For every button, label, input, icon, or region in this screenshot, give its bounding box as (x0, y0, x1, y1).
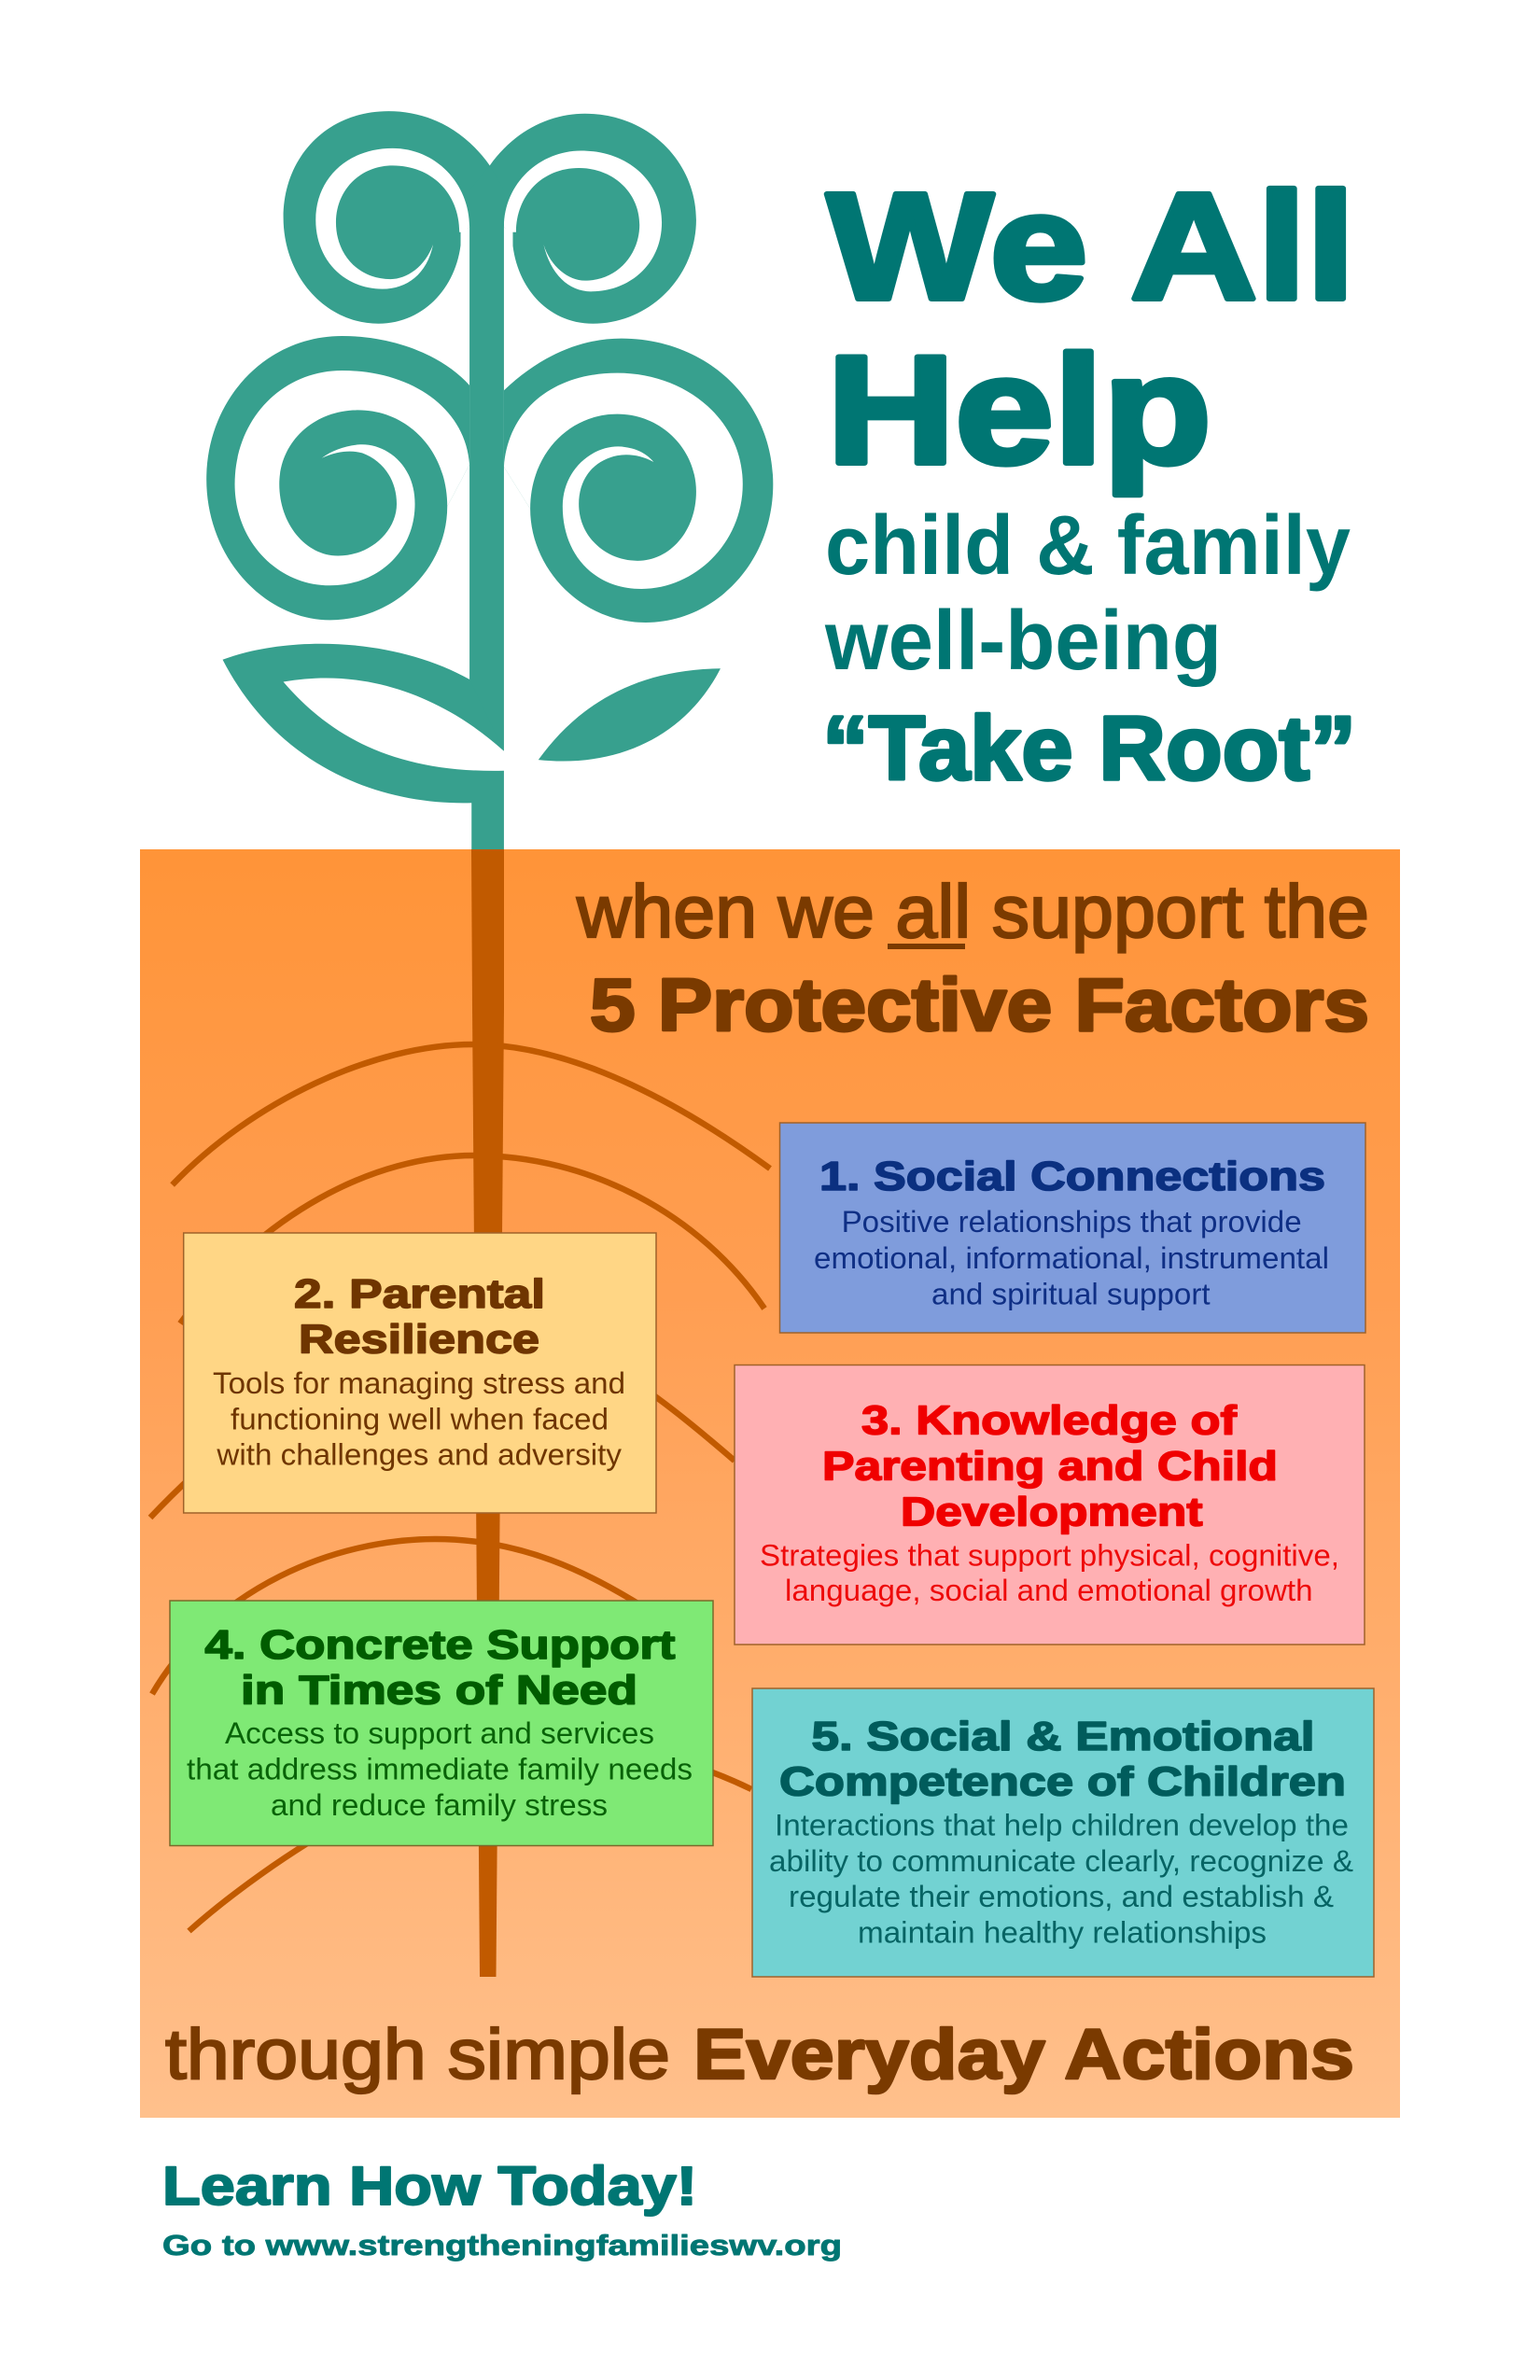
heading: Social and Emotional Competence of Children (779, 1714, 1346, 1805)
text: Knowledge description (760, 1538, 1339, 1607)
heading: through simple Everyday Actions: through simple (165, 2015, 670, 2094)
panel: 4. Concrete Support in Times of Need (170, 1601, 713, 1846)
icon: top right spiral (490, 114, 696, 332)
heading: Social and Emotional Competence of Children: 5. Social & Emotional (812, 1714, 1314, 1759)
panel: orange root background (140, 849, 1400, 2118)
text: Knowledge description: Strategies that support physical, cognitive, (760, 1538, 1339, 1572)
text: Parental Resilience description: with challenges and adversity (216, 1438, 622, 1472)
icon: root branches (150, 1044, 770, 1931)
text: Social Connections description (814, 1205, 1329, 1311)
text: Concrete Support description (187, 1716, 693, 1822)
heading: Concrete Support in Times of Need (205, 1622, 676, 1714)
heading: Knowledge of Parenting and Child Development (822, 1398, 1278, 1535)
heading: Parental Resilience: Resilience (299, 1316, 539, 1363)
icon: stem (469, 165, 504, 751)
text: Concrete Support description: that address immediate family needs (187, 1753, 693, 1786)
heading: 5 Protective Factors: 5 Protective Factors (590, 963, 1369, 1046)
text: Parental Resilience description (213, 1366, 625, 1472)
chart: root system (150, 849, 770, 1977)
heading: Knowledge of Parenting and Child Development: Development (901, 1490, 1203, 1535)
panel: 3. Knowledge of Parenting and Child Development (735, 1365, 1365, 1645)
heading: Parental Resilience: 2. Parental (294, 1271, 545, 1317)
icon: tree logo with spirals and leaves (206, 111, 773, 849)
panel: 1. Social Connections (780, 1123, 1365, 1333)
subheading: child and family: child & family (825, 499, 1351, 593)
icon: right leaf (539, 668, 721, 762)
text: Social Connections description: emotional, informational, instrumental (814, 1241, 1329, 1275)
heading: Parental Resilience (294, 1271, 545, 1363)
heading: Help: Help (827, 324, 1211, 496)
heading: Learn How Today: Learn How Today! (162, 2156, 697, 2217)
text: Social and Emotional description: regulate their emotions, and establish & (789, 1880, 1334, 1913)
heading: through simple Everyday Actions (165, 2015, 1354, 2094)
text: Social Connections description: Positive relationships that provide (842, 1205, 1302, 1239)
icon: large left spiral (206, 336, 469, 620)
subheading: well-being: well-being (824, 595, 1222, 688)
icon: left leaf (223, 644, 504, 849)
text: Social and Emotional description: Interactions that help children develop the (775, 1809, 1349, 1842)
heading: Social Connections: 1. Social Connections (819, 1154, 1325, 1199)
text: Parental Resilience description: Tools for managing stress and (213, 1366, 625, 1400)
heading: We All: We All (827, 161, 1355, 331)
heading: through simple Everyday Actions: Everyday Actions (693, 2015, 1354, 2094)
text: Parental Resilience description: functioning well when faced (231, 1402, 609, 1435)
panel: 2. Parental Resilience (184, 1233, 656, 1513)
text: Knowledge description: language, social and emotional growth (785, 1574, 1312, 1607)
heading: Knowledge of Parenting and Child Development: 3. Knowledge of (861, 1398, 1237, 1444)
icon: main root trunk (471, 849, 504, 1977)
title (822, 161, 1356, 799)
text: Concrete Support description: and reduce family stress (271, 1788, 608, 1822)
subheading: Take Root: “Take Root” (822, 697, 1356, 799)
heading: Concrete Support in Times of Need: in Times of Need (241, 1667, 637, 1714)
heading: Knowledge of Parenting and Child Development: Parenting and Child (822, 1444, 1278, 1490)
text: Concrete Support description: Access to support and services (225, 1716, 654, 1750)
text: Social and Emotional description: ability to communicate clearly, recognize & (769, 1844, 1353, 1878)
icon: large right spiral (504, 339, 773, 623)
heading: Social and Emotional Competence of Children: Competence of Children (779, 1759, 1346, 1805)
heading: Concrete Support in Times of Need: 4. Concrete Support (205, 1622, 676, 1668)
text: Social and Emotional description (769, 1809, 1353, 1950)
callout: Learn How Today (162, 2156, 842, 2261)
text: Social and Emotional description: maintain healthy relationships (858, 1916, 1267, 1950)
icon: top left spiral (284, 111, 490, 332)
heading: when we all support the: when we all support the (576, 870, 1369, 953)
text: Social Connections description: and spiritual support (931, 1278, 1211, 1311)
text: website: Go to www.strengtheningfamilieswv.org (162, 2229, 842, 2261)
panel: 5. Social and Emotional Competence of Children (752, 1688, 1374, 1977)
